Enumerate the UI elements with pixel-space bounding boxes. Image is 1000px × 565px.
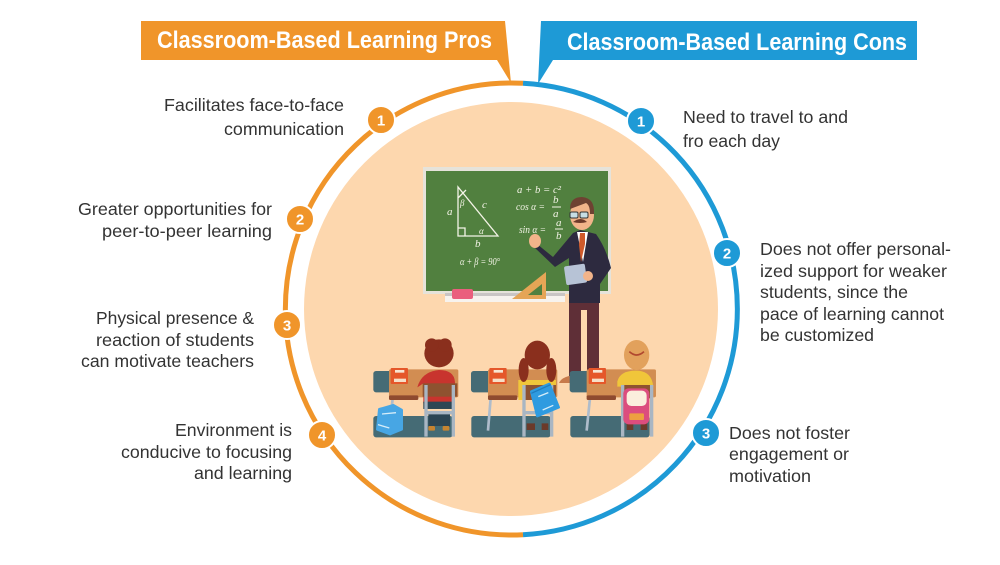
- badge: con 2: 2: [723, 246, 731, 262]
- text: pro 3: Physical presence &: [96, 308, 254, 328]
- illustration: chalkboard: [423, 167, 611, 302]
- student 2: girl in yellow with blue backpack: [471, 341, 559, 437]
- text: pro 3: reaction of students: [96, 330, 254, 350]
- illustration: chalkboard: α: [479, 226, 484, 236]
- text: pro 1: communication: [224, 119, 344, 139]
- illustration: chalkboard: c: [482, 199, 487, 211]
- illustration: chalkboard: b: [553, 194, 559, 206]
- badge: pro 4: [308, 421, 336, 449]
- text: pro 2: Greater opportunities for: [78, 199, 272, 219]
- text: con 2: be customized: [760, 325, 874, 345]
- text: pro 2: [78, 199, 272, 241]
- illustration: chalkboard: cos α =: [516, 201, 545, 213]
- orange ring arc: pros: [285, 83, 523, 535]
- text: con 1: Need to travel to and: [683, 107, 848, 127]
- text: con 3: motivation: [729, 466, 811, 486]
- text: con 2: ized support for weaker: [760, 261, 947, 281]
- text: con 3: engagement or: [729, 444, 849, 464]
- heading: cons banner: [538, 21, 917, 84]
- text: con 2: [760, 239, 951, 345]
- badge: con 3: [692, 419, 720, 447]
- student 1: boy in red at desk with blue backpack: [373, 338, 458, 437]
- text: pro 4: conducive to focusing: [121, 442, 292, 462]
- text: pro 2: peer-to-peer learning: [102, 221, 272, 241]
- badge: pro 3: 3: [283, 318, 291, 334]
- heading: pros banner: Classroom-Based Learning Pros: [157, 27, 492, 54]
- illustration: chalkboard: sin α =: [519, 224, 546, 236]
- illustration: chalkboard: α + β = 90°: [460, 256, 500, 268]
- badge: pro 1: [367, 106, 395, 134]
- badge: pro 2: [286, 205, 314, 233]
- text: con 3: Does not foster: [729, 423, 850, 443]
- badge: pro 3: [273, 311, 301, 339]
- badge: pro 1: 1: [377, 112, 385, 130]
- illustration: chalkboard: b: [475, 238, 481, 250]
- illustration: teacher: [529, 197, 611, 383]
- illustration: chalkboard: a: [556, 217, 562, 229]
- text: pro 3: [81, 308, 254, 371]
- text: pro 3: can motivate teachers: [81, 351, 254, 371]
- badge: con 1: [627, 107, 655, 135]
- badge: con 2: [713, 239, 741, 267]
- badge: pro 4: 4: [318, 428, 327, 444]
- text: con 1: fro each day: [683, 131, 780, 151]
- badge: con 3: 3: [702, 426, 710, 442]
- badge: con 1: 1: [637, 114, 645, 130]
- text: con 2: students, since the: [760, 282, 908, 302]
- illustration: chalkboard: a: [447, 206, 453, 218]
- illustration: chalkboard: a + b = c²: [517, 184, 562, 196]
- text: con 2: pace of learning cannot: [760, 304, 944, 324]
- text: pro 4: [121, 420, 292, 483]
- heading: pros banner: [141, 21, 511, 83]
- text: pro 4: Environment is: [175, 420, 292, 440]
- heading: cons banner: Classroom-Based Learning Cons: [567, 29, 907, 56]
- illustration: student desks row: [373, 338, 656, 437]
- text: con 3: [729, 423, 850, 486]
- text: pro 4: and learning: [194, 463, 292, 483]
- text: con 1: [683, 107, 848, 151]
- blue ring arc: cons: [523, 83, 737, 535]
- text: con 2: Does not offer personal-: [760, 239, 951, 259]
- illustration: chalkboard: b: [556, 230, 562, 242]
- illustration: chalkboard: a: [553, 208, 559, 220]
- text: pro 1: Facilitates face-to-face: [164, 95, 344, 115]
- student 3: blonde child with pink backpack: [570, 340, 656, 437]
- inner peach circle: [304, 102, 718, 516]
- illustration: chalkboard: β: [459, 198, 465, 208]
- badge: pro 2: 2: [296, 212, 304, 228]
- text: pro 1: [164, 95, 344, 139]
